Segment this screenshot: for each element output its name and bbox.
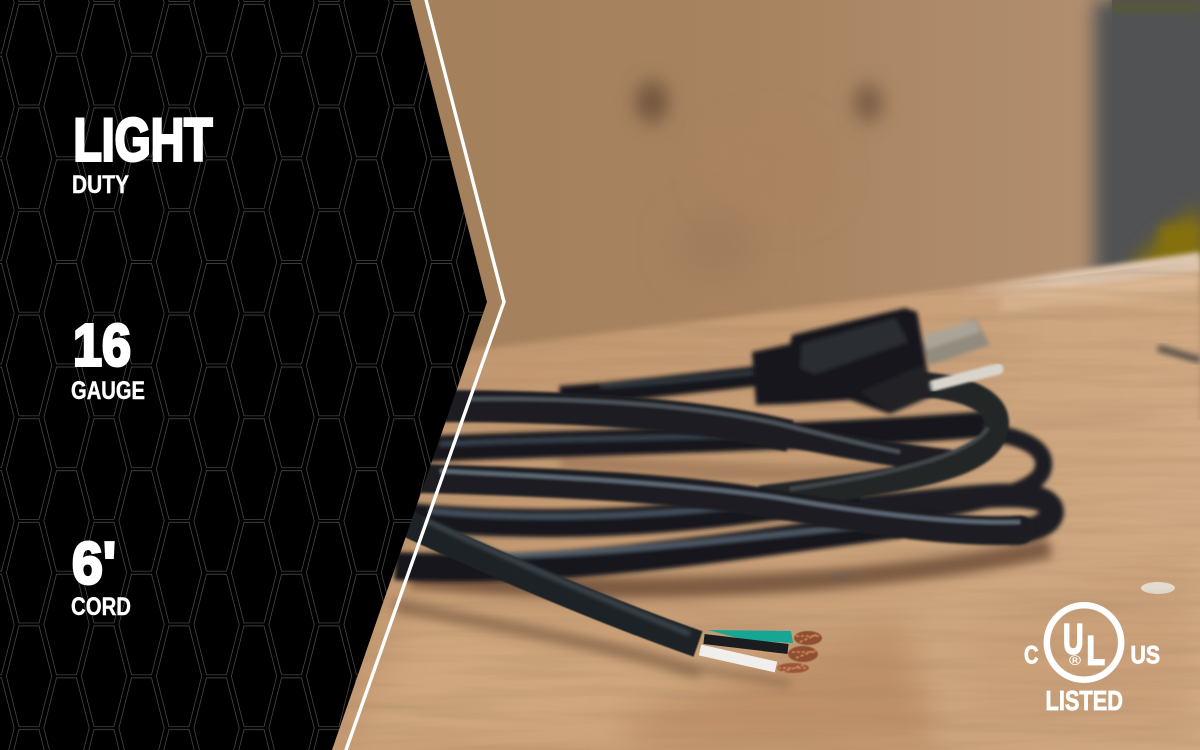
black cord coils	[395, 372, 1052, 568]
UL listed certification mark	[1024, 605, 1160, 716]
letter c: C	[1024, 642, 1038, 670]
label: cord: CORD	[71, 593, 131, 621]
photo background wall and workbench	[300, 0, 1200, 750]
front cord jacket	[370, 506, 698, 644]
heading: 6': 6'	[72, 530, 116, 596]
white wire	[700, 650, 776, 667]
plug ground pin	[932, 369, 998, 386]
copper strands	[777, 631, 822, 673]
spec: light duty	[72, 107, 212, 199]
spec: 16 gauge	[71, 312, 145, 405]
label: duty: DUTY	[72, 171, 129, 199]
photo: cord on workbench	[300, 0, 1200, 750]
letter U: U	[1063, 616, 1084, 664]
coil back strands	[395, 372, 1052, 568]
plug	[752, 308, 998, 414]
white chevron line	[344, 0, 506, 750]
spec: 6 foot cord	[71, 530, 131, 621]
front cord end with wires	[370, 506, 822, 673]
label: gauge: GAUGE	[71, 377, 145, 405]
letter L: L	[1086, 628, 1105, 674]
plug body	[752, 308, 932, 414]
heading: light: LIGHT	[74, 107, 212, 174]
letters US: US	[1130, 642, 1160, 670]
coil front strands	[400, 384, 1020, 531]
black wire	[704, 639, 788, 649]
plug prongs	[920, 318, 990, 365]
UL ring	[1047, 605, 1121, 680]
listed label: LISTED	[1046, 685, 1123, 716]
cast shadows	[395, 462, 1050, 684]
registered mark: ®	[1069, 652, 1082, 668]
black panel with hexagon pattern	[0, 0, 487, 750]
heading: 16: 16	[73, 312, 131, 378]
green wire	[708, 630, 793, 643]
